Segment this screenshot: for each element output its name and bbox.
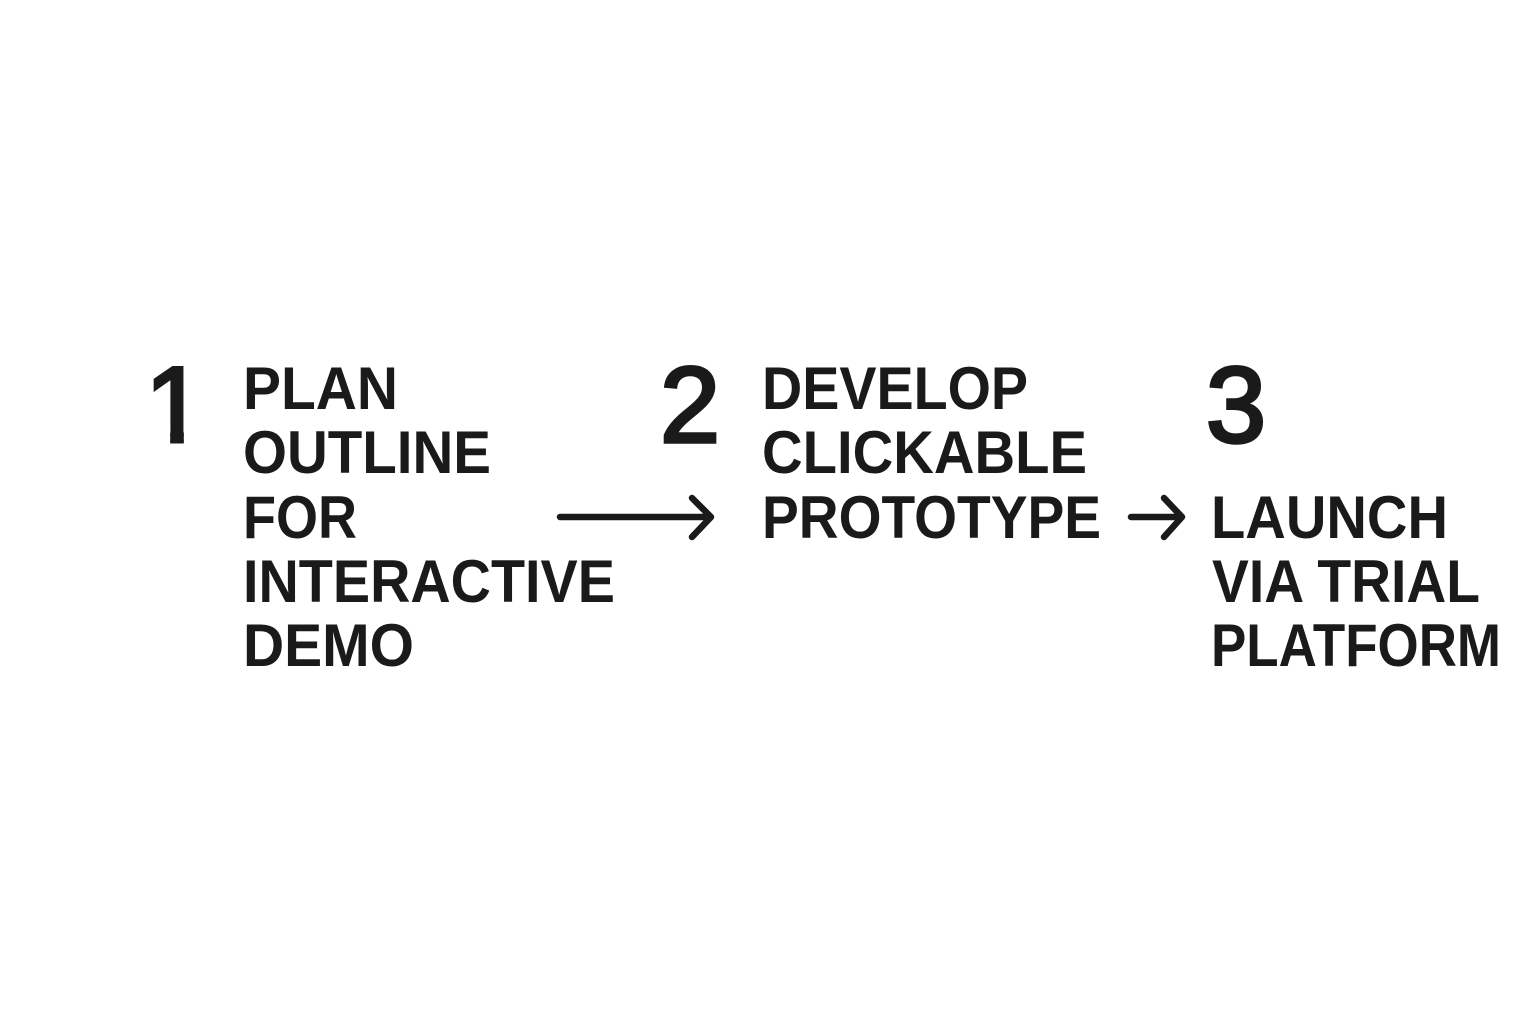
step 3 text: PLATFORM [1211, 612, 1501, 679]
step 3 text [1211, 484, 1501, 679]
step 1 text [243, 355, 615, 679]
step 2 text: PROTOTYPE [762, 484, 1101, 551]
arrow: step 2 to step 3 [1131, 498, 1182, 537]
step 1 text: INTERACTIVE [243, 548, 615, 615]
arrow: step 1 to step 2 [560, 498, 711, 537]
step 1 number: 1 [145, 344, 205, 465]
step 3 text: VIA TRIAL [1212, 548, 1480, 615]
step 1 text: PLAN [243, 355, 398, 422]
step 3 text: LAUNCH [1211, 484, 1448, 551]
step 1 text: DEMO [243, 612, 414, 679]
step 2 number: 2 [660, 344, 720, 465]
step 1 text: FOR [243, 484, 357, 551]
step 1 text: OUTLINE [243, 419, 491, 486]
step 2 text [762, 355, 1101, 551]
step 2 text: CLICKABLE [762, 419, 1087, 486]
step 3 number: 3 [1206, 344, 1266, 465]
step 2 text: DEVELOP [762, 355, 1028, 422]
